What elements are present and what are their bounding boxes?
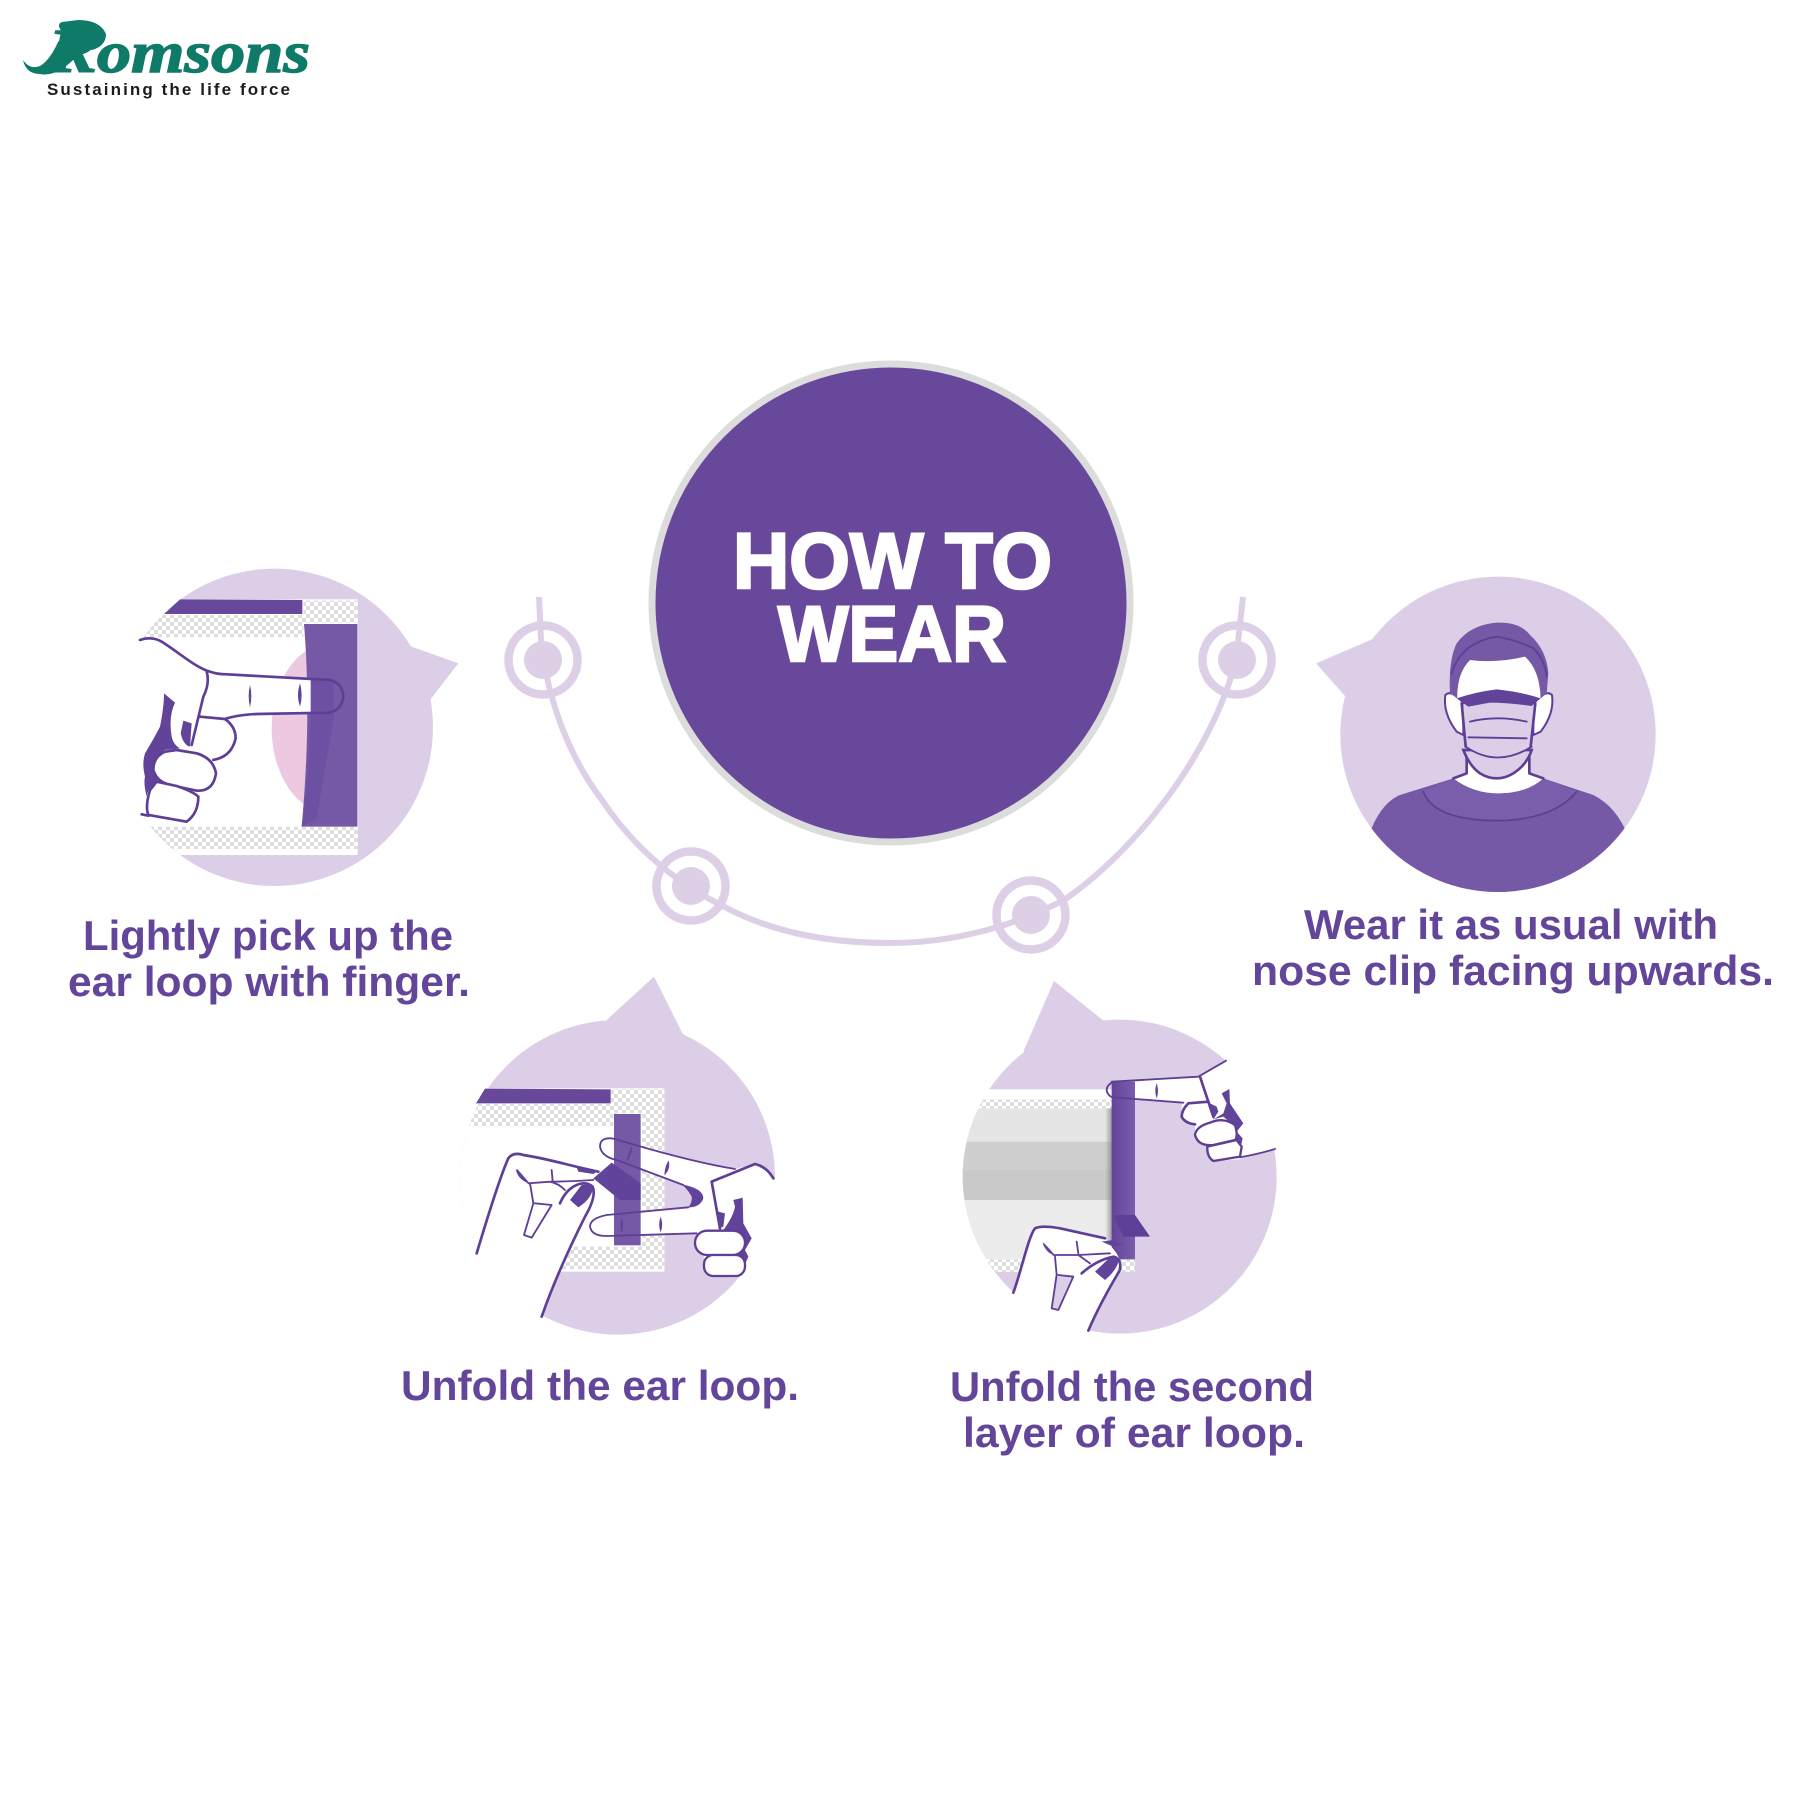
circle badge xyxy=(652,364,1130,842)
label: step 4: nose clip facing upwards. xyxy=(1252,947,1774,994)
logo tagline: Sustaining the life force xyxy=(47,80,290,99)
face xyxy=(1457,657,1541,702)
bottom left hand xyxy=(1013,1227,1123,1331)
label: step 4 xyxy=(1252,901,1774,994)
speech bubble xyxy=(1316,577,1656,892)
label: step 4: Wear it as usual with xyxy=(1304,901,1718,948)
mask sheet xyxy=(140,599,358,855)
node 2 xyxy=(656,852,726,920)
ears xyxy=(1445,693,1552,735)
label: step 1 xyxy=(68,912,470,1005)
hair xyxy=(1450,623,1548,698)
node 3 xyxy=(996,880,1066,950)
label: step 3 xyxy=(950,1363,1314,1456)
mask sheet xyxy=(450,1088,664,1272)
right hand white fill xyxy=(590,1138,787,1290)
central title circle xyxy=(652,364,1130,842)
title text: HOW TO xyxy=(733,516,1052,605)
title text xyxy=(733,516,1052,678)
curved connector line xyxy=(539,597,1243,943)
unfolded mask xyxy=(960,1089,1135,1272)
folded corner xyxy=(1113,1215,1150,1237)
right hand outlines xyxy=(590,1138,773,1276)
panel: step 2 unfold ear loop xyxy=(450,977,787,1335)
speech bubble xyxy=(460,977,775,1335)
top purple band xyxy=(164,599,302,614)
left hand xyxy=(450,1154,598,1317)
person torso xyxy=(1368,778,1628,897)
ear loop strip xyxy=(1112,1082,1135,1259)
folded corner xyxy=(593,1163,641,1200)
logo: Romsons xyxy=(23,18,310,99)
label: step 1: Lightly pick up the xyxy=(83,912,453,959)
top right hand white fill xyxy=(1135,1061,1283,1161)
logo swash xyxy=(23,20,106,74)
title text: WEAR xyxy=(778,589,1006,678)
panel: step 3 unfold second layer xyxy=(960,981,1283,1334)
label: step 3: Unfold the second xyxy=(950,1363,1314,1410)
logo wordmark: Romsons xyxy=(47,18,310,86)
connector arc with nodes xyxy=(508,597,1272,950)
top purple band xyxy=(476,1089,611,1103)
hand xyxy=(110,638,343,822)
node 4 xyxy=(1202,626,1272,694)
top right hand xyxy=(1107,1061,1275,1161)
neck xyxy=(1453,757,1543,793)
label: step 2: Unfold the ear loop. xyxy=(401,1362,799,1409)
panel: step 1 pick up ear loop xyxy=(107,569,458,886)
speech bubble xyxy=(963,981,1277,1334)
ear loop strip xyxy=(302,624,357,827)
label: step 1: ear loop with finger. xyxy=(68,958,470,1005)
ear loop strip xyxy=(614,1114,641,1245)
speech bubble xyxy=(116,569,458,886)
panel: step 4 wear it xyxy=(1316,577,1656,897)
node 1 xyxy=(508,626,578,694)
label: step 3: layer of ear loop. xyxy=(963,1409,1305,1456)
face mask xyxy=(1457,689,1541,778)
